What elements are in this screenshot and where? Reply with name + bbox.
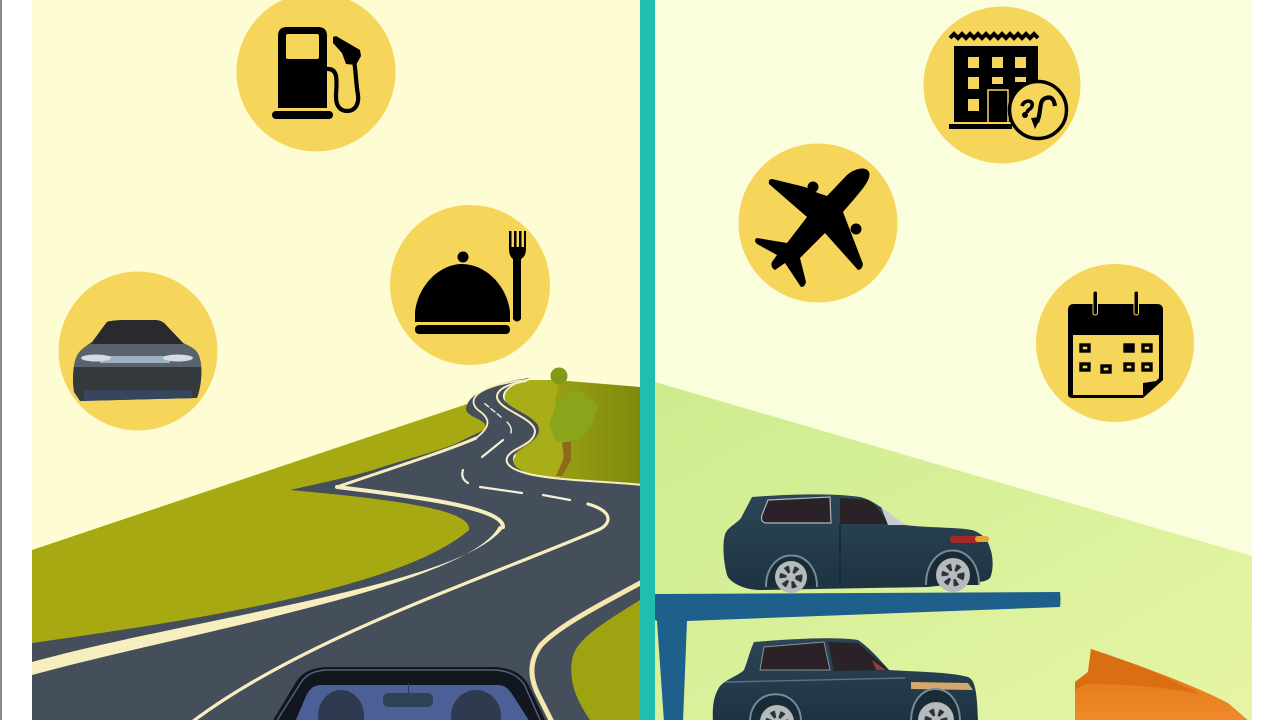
road edge lines [32,380,644,720]
centre dashes [462,403,570,500]
tree [549,368,598,476]
suv: lower [713,638,978,720]
background hill [515,380,640,486]
icon: serving cloche and fork [390,205,550,365]
near-side hill highlight [505,380,565,480]
light green slope [655,382,1252,720]
panel: road trip (left) [32,0,644,720]
suv: upper [723,494,993,593]
orange shape [1075,649,1250,720]
icon: airplane [738,144,898,302]
icon: hotel [924,6,1080,164]
lower-right hill [571,600,640,720]
car seen from behind the windscreen [272,667,546,720]
badge [1010,82,1066,138]
icon: calendar [1036,264,1194,422]
divider: teal bar [640,0,655,720]
icon: car rear view [58,272,218,430]
car shelf [655,592,1060,720]
winding road [32,378,640,720]
panel: air travel (right) [655,0,1252,720]
icon: fuel pump [236,0,396,152]
foreground hill [32,403,500,650]
